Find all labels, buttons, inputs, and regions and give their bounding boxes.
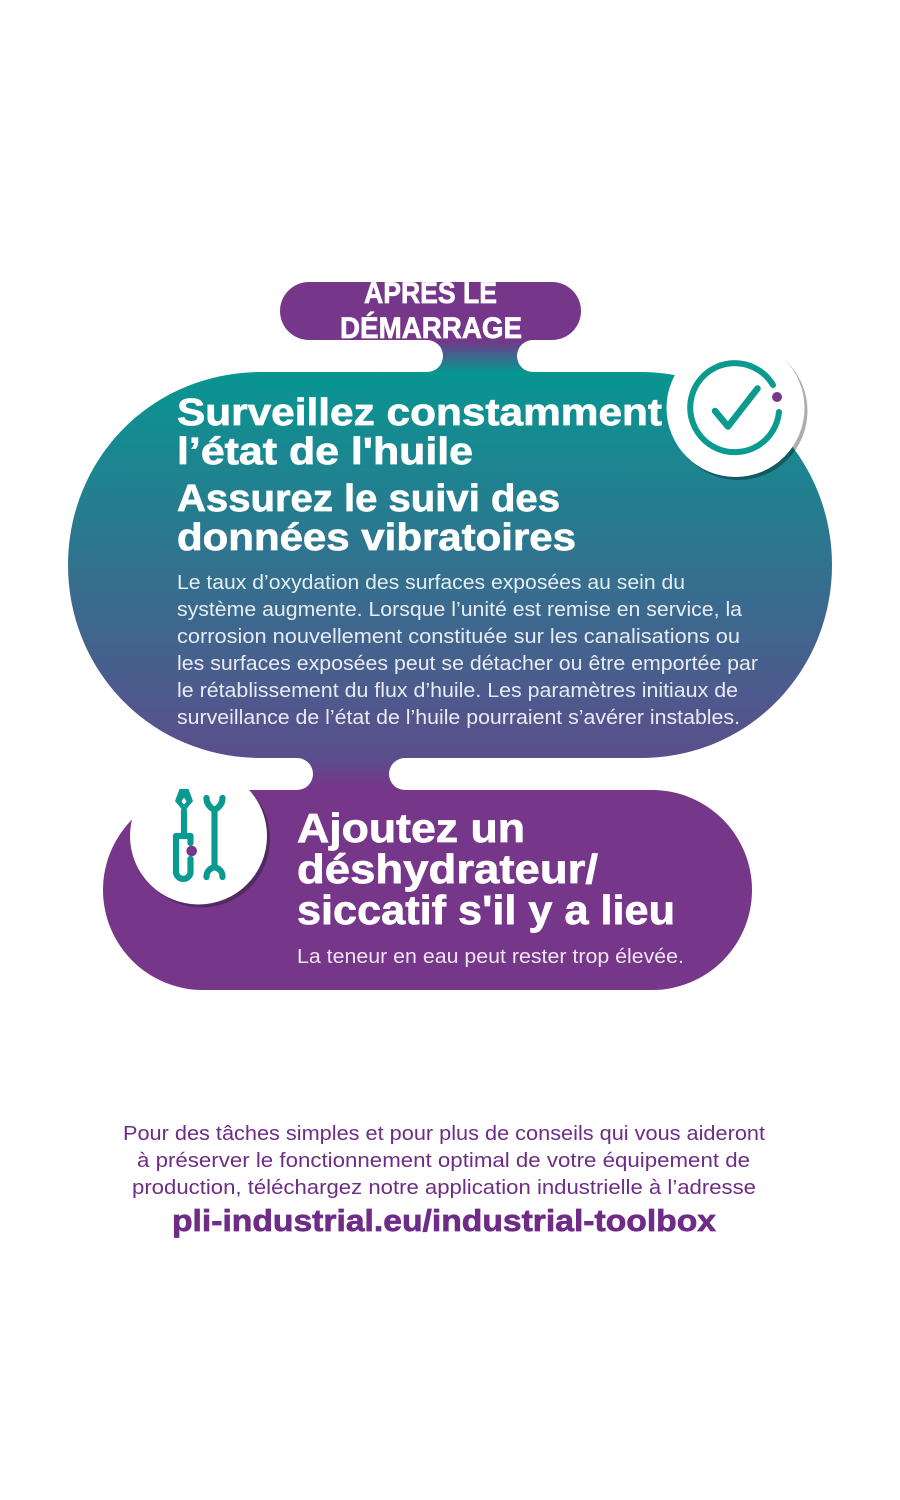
body text: oxydation: surveillance de l’état de l’huile pourraient s’avérer instables. xyxy=(177,707,740,729)
body text: oxydation: corrosion nouvellement constituée sur les canalisations ou xyxy=(177,626,740,648)
heading: après le démarrage: DÉMARRAGE xyxy=(340,311,522,345)
heading: suivi des données vibratoires: données vibratoires xyxy=(177,517,576,559)
icon: tools badge xyxy=(130,768,270,908)
header pill xyxy=(280,282,581,340)
heading: surveillez constamment xyxy=(177,392,662,473)
footer text: production, téléchargez notre application industrielle à l’adresse xyxy=(132,1177,756,1199)
panel: après le démarrage header xyxy=(280,282,581,340)
heading: ajoutez un déshydrateur: Ajoutez un xyxy=(297,805,525,851)
lower panel shape xyxy=(103,790,752,990)
body text: oxydation: Le taux d’oxydation des surfaces exposées au sein du xyxy=(177,572,685,594)
link: toolbox url: pli-industrial.eu/industrial-toolbox xyxy=(172,1203,717,1238)
connector: header to main panel xyxy=(427,340,533,372)
heading: après le démarrage: APRÈS LE xyxy=(364,276,497,310)
heading: suivi des données vibratoires xyxy=(177,478,576,559)
body text: oxydation: les surfaces exposées peut se détacher ou être emportée par xyxy=(177,653,758,675)
body text: oxydation xyxy=(177,572,758,729)
footer text: Pour des tâches simples et pour plus de conseils qui vous aideront xyxy=(123,1123,765,1145)
heading: après le démarrage xyxy=(342,282,522,339)
body text: teneur en eau: La teneur en eau peut rester trop élevée. xyxy=(297,946,684,968)
connector: main panel to lower panel xyxy=(297,758,405,790)
heading: suivi des données vibratoires: Assurez le suivi des xyxy=(177,478,560,520)
heading: ajoutez un déshydrateur xyxy=(297,805,675,933)
main panel shape xyxy=(68,372,832,758)
icon: check mark badge xyxy=(666,339,808,480)
footer text: à préserver le fonctionnement optimal de votre équipement de xyxy=(137,1150,750,1172)
heading: ajoutez un déshydrateur: siccatif s'il y a lieu xyxy=(297,887,675,933)
heading: surveillez constamment: l’état de l'huile xyxy=(177,431,473,473)
panel: surveillance xyxy=(68,372,832,758)
body text: oxydation: système augmente. Lorsque l’unité est remise en service, la xyxy=(177,599,743,621)
heading: ajoutez un déshydrateur: déshydrateur/ xyxy=(297,846,598,892)
body text: oxydation: le rétablissement du flux d’huile. Les paramètres initiaux de xyxy=(177,680,738,702)
heading: surveillez constamment: Surveillez constamment xyxy=(177,392,662,434)
panel: déshydrateur xyxy=(103,790,752,990)
footer text xyxy=(123,1123,765,1238)
